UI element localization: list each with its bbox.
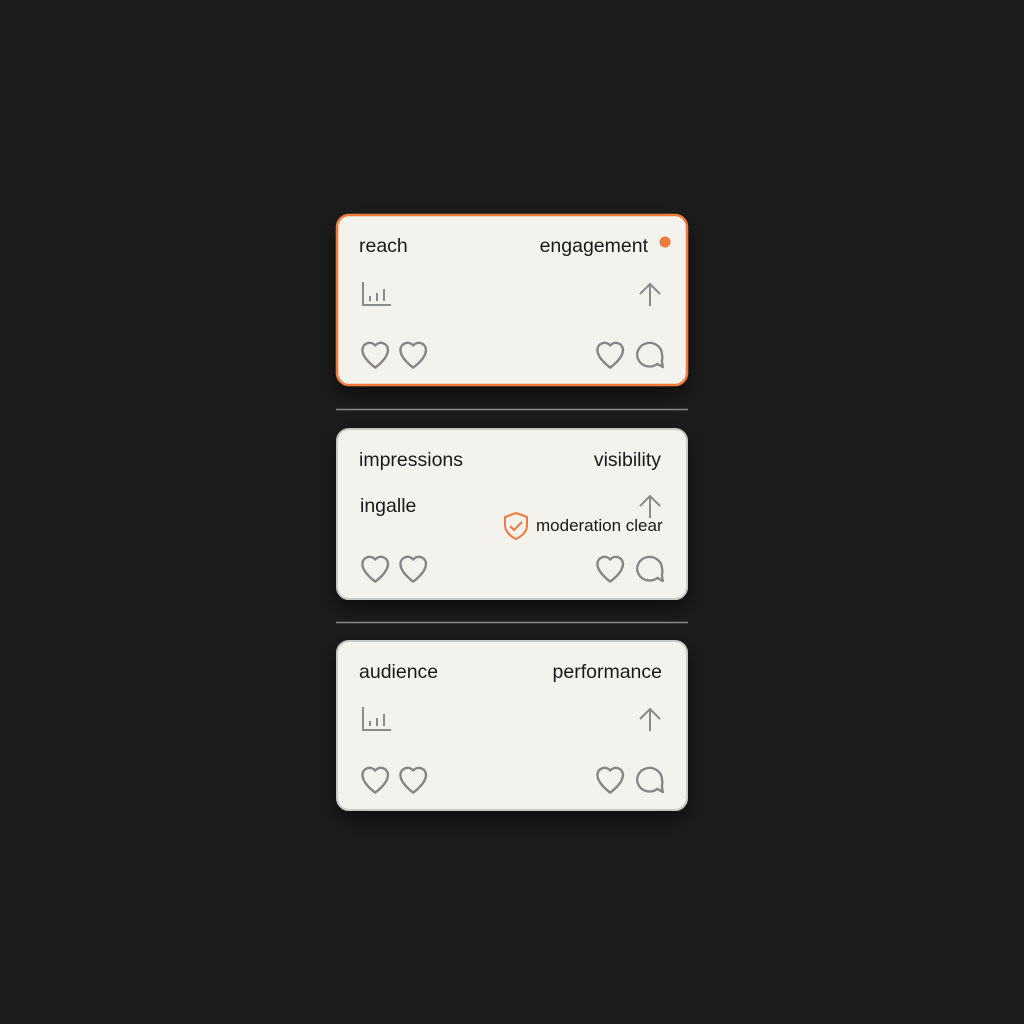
icon: up arrow [640, 709, 660, 731]
moderation badge [505, 513, 663, 539]
status dot [660, 236, 670, 248]
icon: bar chart [363, 707, 391, 730]
label: audience: audience [359, 661, 438, 683]
label: ingalle: ingalle [360, 495, 416, 517]
moderation badge: moderation clear [536, 516, 663, 535]
icon: up arrow [640, 496, 660, 518]
label: impressions: impressions [359, 449, 463, 471]
card: audience / performance [337, 641, 687, 810]
icon: up arrow [640, 284, 660, 306]
icon: bar chart [363, 282, 391, 305]
icons: hearts and comment [362, 557, 663, 582]
icons: hearts and comment [362, 343, 663, 368]
label: reach: reach [359, 235, 408, 257]
card: impressions / visibility [337, 429, 687, 599]
label: visibility: visibility [594, 449, 661, 471]
label: performance: performance [553, 661, 662, 683]
card: reach / engagement [337, 215, 687, 385]
label: engagement: engagement [540, 235, 649, 257]
icons: hearts and comment [362, 768, 663, 793]
